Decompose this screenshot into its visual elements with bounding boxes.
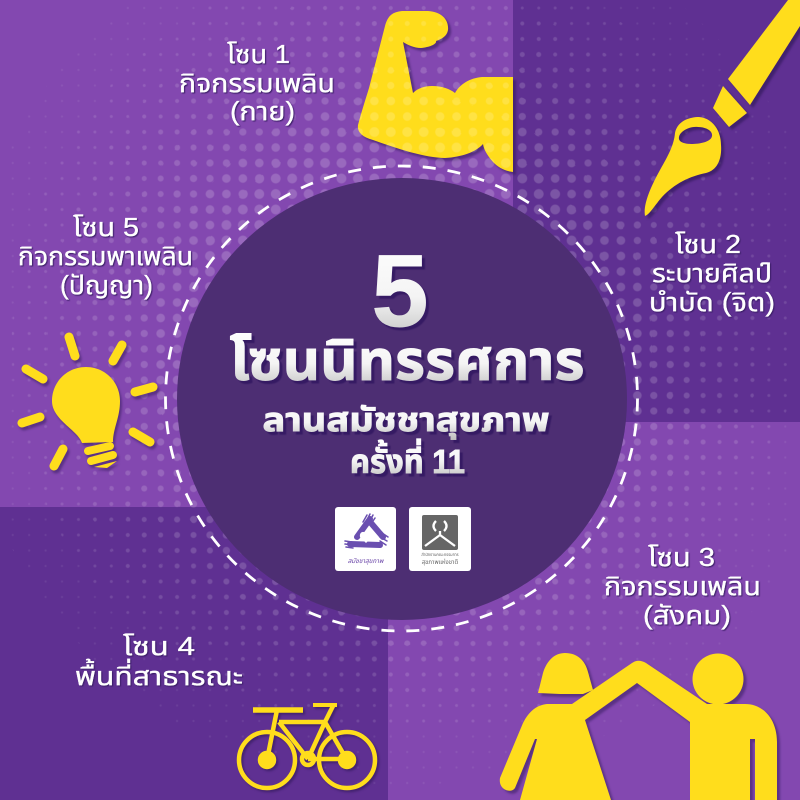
- label: zone 5: กิจกรรมพาเพลิน: [18, 241, 193, 271]
- label: zone 1: โซน 1: [227, 39, 290, 69]
- main title number: 5: [372, 234, 428, 348]
- label: zone 5: โซน 5: [73, 212, 139, 242]
- panel: background top right: [513, 0, 800, 422]
- logo: national health commission: สำนักงานคณะกรรมการ: [421, 552, 459, 557]
- label: zone 3: กิจกรรมเพลิน: [604, 571, 761, 601]
- logo: community hands: สมัชชาสุขภาพ: [348, 557, 385, 565]
- label: zone 2: โซน 2: [675, 229, 741, 259]
- icon: paint brush: [645, 0, 800, 216]
- label: zone 5: [18, 212, 193, 300]
- label: zone 3: [604, 542, 761, 630]
- label: zone 2: บำบัด (จิต): [649, 287, 775, 317]
- panel: background bottom right: [388, 422, 800, 800]
- logo: community hands: [335, 507, 396, 571]
- label: zone 2: [649, 229, 775, 317]
- label: zone 1: (กาย): [230, 96, 295, 126]
- label: zone 2: ระบายศิลป์: [652, 258, 772, 288]
- main title: โซนนิทรรศการ: [230, 329, 584, 392]
- dashed ring: [166, 166, 638, 631]
- label: zone 3: (สังคม): [643, 600, 731, 630]
- subtitle line 2: ครั้งที่ 11: [350, 438, 465, 480]
- panel: background top left: [0, 0, 513, 507]
- icon: bicycle: [239, 705, 375, 788]
- icon: light bulb: [22, 337, 153, 468]
- label: zone 4: พื้นที่สาธารณะ: [75, 658, 243, 691]
- label: zone 5: (ปัญญา): [60, 270, 153, 300]
- logo: national health commission: [409, 507, 471, 571]
- logo: national health commission: สุขภาพแห่งชาติ: [422, 559, 458, 566]
- center circle: [177, 178, 627, 620]
- label: zone 4: [75, 631, 243, 691]
- icon: two people: [500, 653, 777, 800]
- subtitle line 1: ลานสมัชชาสุขภาพ: [262, 401, 550, 440]
- label: zone 4: โซน 4: [123, 631, 195, 661]
- label: zone 3: โซน 3: [648, 542, 715, 572]
- label: zone 1: กิจกรรมเพลิน: [179, 68, 335, 98]
- label: zone 1: [179, 39, 335, 126]
- panel: background bottom left: [0, 507, 388, 800]
